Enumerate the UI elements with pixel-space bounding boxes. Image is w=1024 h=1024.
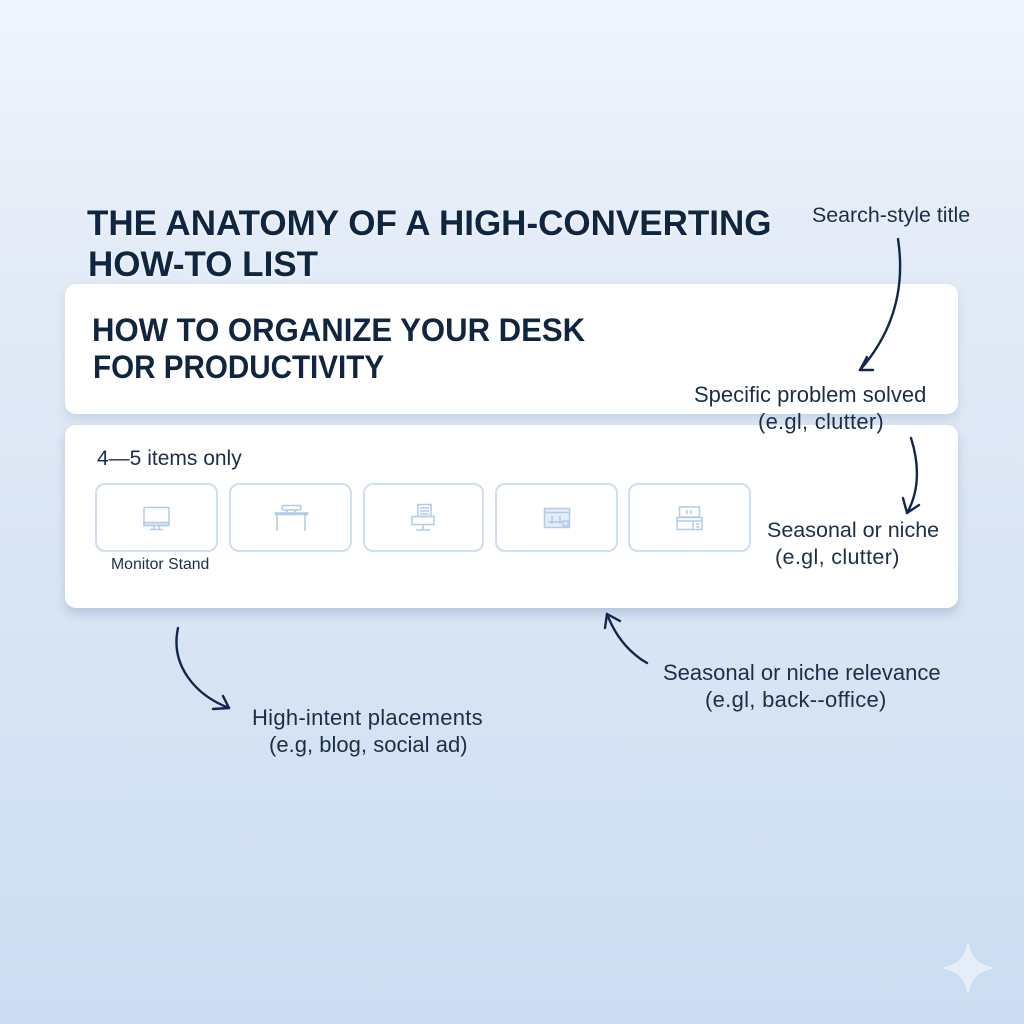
title: [87, 204, 771, 284]
icon: monitor: [143, 506, 170, 530]
callout: seasonal relevance: [663, 660, 941, 712]
callout: placements: High-intent placements: [252, 705, 483, 730]
item box: monitor stand: [95, 483, 218, 552]
card heading: [92, 312, 585, 385]
title: THE ANATOMY OF A HIGH-CONVERTING: [87, 204, 771, 243]
callout: seasonal or niche: [767, 518, 939, 569]
arrow: seasonal relevance up: [604, 612, 648, 664]
item box: cabinet: [628, 483, 751, 552]
item box: printer: [363, 483, 484, 552]
panel: search title card: [65, 284, 958, 414]
callout: placements: [252, 705, 483, 757]
icon: desk: [274, 504, 308, 531]
callout: seasonal or niche: Seasonal or niche: [767, 518, 939, 542]
item box: dashboard: [495, 483, 618, 552]
arrow: title to problem: [858, 238, 902, 372]
icon: sparkle: [943, 943, 992, 993]
callout: seasonal relevance: Seasonal or niche relevance: [663, 660, 941, 685]
callout: specific problem: (e.gl, clutter): [758, 409, 884, 434]
item caption: Monitor Stand: [111, 556, 209, 573]
item box: desk: [229, 483, 352, 552]
arrow: placements: [175, 626, 230, 710]
callout: specific problem: [694, 382, 926, 434]
panel: items card: [65, 425, 958, 608]
callout: seasonal relevance: (e.gl, back--office): [705, 687, 887, 712]
icon: cabinet: [676, 506, 703, 530]
title: HOW-TO LIST: [88, 245, 318, 284]
callout: search-style title: Search-style title: [812, 203, 970, 227]
icon: dashboard: [544, 508, 570, 528]
arrow: problem to seasonal: [902, 436, 920, 514]
card heading: HOW TO ORGANIZE YOUR DESK: [92, 312, 585, 348]
callout: seasonal or niche: (e.gl, clutter): [775, 545, 900, 569]
callout: specific problem: Specific problem solved: [694, 382, 926, 407]
card heading: FOR PRODUCTIVITY: [93, 349, 384, 385]
callout: placements: (e.g, blog, social ad): [269, 732, 468, 757]
items label: 4—5 items only: [97, 447, 242, 470]
icon: printer: [411, 504, 435, 531]
